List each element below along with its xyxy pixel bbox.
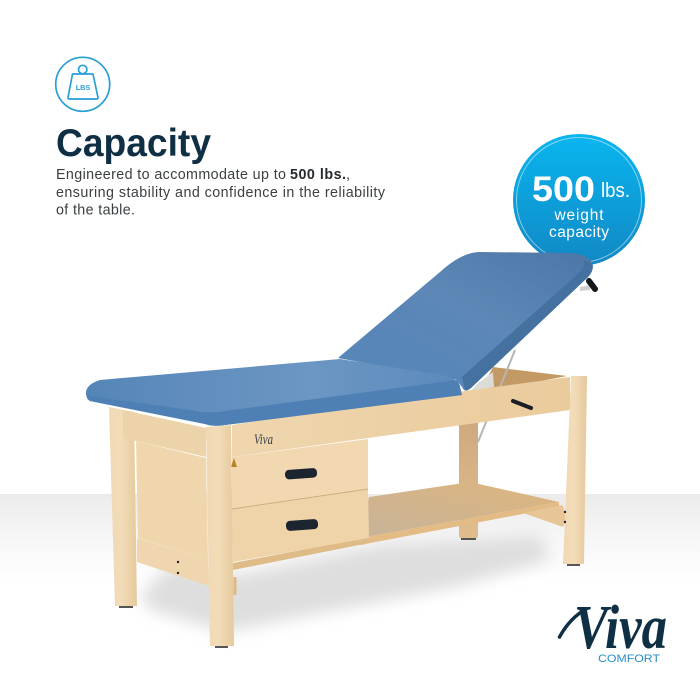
small bracket tab bbox=[234, 577, 236, 595]
back right leg bbox=[459, 420, 478, 540]
warning label bbox=[231, 458, 237, 467]
callout badge: 500 lbs weight capacity: 500 bbox=[532, 170, 595, 209]
lever handle bbox=[513, 401, 531, 408]
background: grey floor bbox=[0, 494, 700, 700]
logo wordmark: Viva bbox=[574, 594, 667, 662]
side rail screws bbox=[177, 561, 179, 574]
back left leg bbox=[109, 407, 137, 608]
icon: weight in circle: LBS bbox=[76, 83, 90, 92]
callout badge: 500 lbs weight capacity: capacity bbox=[549, 224, 609, 241]
brand logo: Viva Comfort bbox=[560, 594, 667, 665]
side panel bbox=[136, 441, 208, 560]
table bbox=[86, 252, 595, 648]
small logo on rail: Viva bbox=[254, 432, 273, 448]
callout badge: 500 lbs weight capacity bbox=[513, 134, 645, 266]
title: Capacity bbox=[56, 122, 211, 165]
body text: , bbox=[346, 167, 350, 183]
tray interior bbox=[480, 367, 567, 392]
front left leg bbox=[206, 425, 234, 648]
right cross brace bbox=[523, 505, 566, 527]
bottom drawer handle bbox=[286, 519, 318, 531]
logo subtitle: COMFORT bbox=[598, 653, 660, 665]
icon: weight in circle bbox=[56, 57, 110, 111]
top drawer bbox=[232, 439, 368, 509]
backrest cushion bbox=[338, 252, 593, 391]
callout badge: 500 lbs weight capacity: weight bbox=[554, 207, 604, 224]
knob bracket bbox=[580, 285, 590, 291]
adjuster knob bbox=[589, 281, 595, 289]
strut bbox=[478, 350, 515, 442]
body text: of the table. bbox=[56, 202, 135, 218]
bottom side rail bbox=[137, 538, 209, 586]
bottom drawer bbox=[232, 489, 369, 562]
hinge bracket bbox=[470, 372, 494, 392]
body text: ensuring stability and confidence in the reliability bbox=[56, 185, 386, 201]
front rail bbox=[232, 377, 570, 457]
top drawer handle bbox=[285, 468, 317, 480]
body text bbox=[56, 167, 386, 218]
callout badge: 500 lbs weight capacity: lbs. bbox=[601, 180, 630, 202]
drawer seam bbox=[232, 489, 368, 509]
body text: Engineered to accommodate up to bbox=[56, 167, 286, 183]
floor shadow under table bbox=[140, 535, 550, 632]
left side rail bbox=[123, 410, 206, 457]
front right leg bbox=[563, 376, 587, 566]
logo flourish bbox=[560, 609, 586, 637]
body text: 500 lbs. bbox=[290, 167, 346, 183]
shelf bbox=[233, 482, 559, 570]
background: white wall bbox=[0, 0, 700, 494]
seat cushion bbox=[86, 359, 462, 426]
leg screws bbox=[564, 511, 566, 523]
